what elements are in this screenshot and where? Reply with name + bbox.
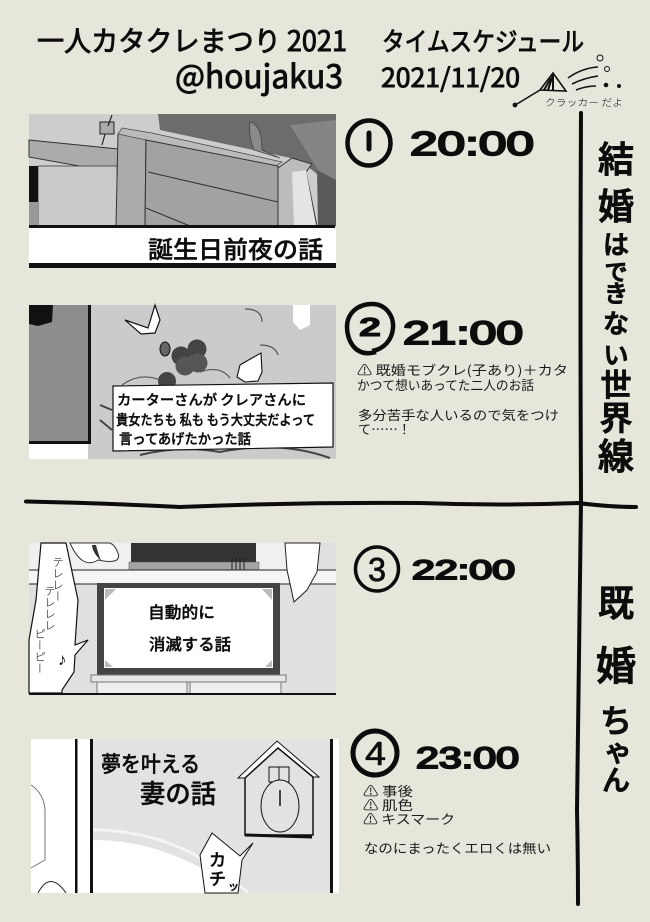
- title: 一人カタクレまつり 2021: [37, 20, 347, 60]
- side label: married: ゃ: [604, 730, 632, 770]
- panel: comic 4: [31, 739, 339, 894]
- side label: married: 婚: [596, 634, 636, 692]
- comic 2 caption box: 貴女たちも 私も もう大丈夫だよって: [116, 410, 315, 430]
- sound bubble: カ: [209, 846, 226, 871]
- time slot 1: [348, 120, 534, 166]
- left sound bubble: テレレー: [50, 556, 66, 602]
- side label: world line where marriage is impossible: 婚: [598, 178, 634, 230]
- title: [37, 20, 584, 60]
- side label: world line where marriage is impossible: い: [603, 336, 629, 372]
- note for slot 2: かつて想いあってた二人のお話: [357, 375, 534, 394]
- TV title: [148, 599, 231, 655]
- left sound bubble: ♪: [58, 650, 66, 669]
- small dog figure: [70, 543, 119, 563]
- right bubble: [285, 543, 320, 602]
- author handle and date: [175, 52, 520, 98]
- side label: married: ち: [600, 696, 632, 742]
- side label: world line where marriage is impossible: 線: [598, 428, 634, 480]
- note for slot 2: て……！: [358, 419, 411, 438]
- author handle and date: @houjaku3: [175, 52, 343, 98]
- author handle and date: 2021/11/20: [381, 58, 520, 95]
- comic 2 caption box: 言ってあげたかった話: [119, 429, 251, 449]
- time slot 3: 3: [368, 551, 386, 588]
- comic 2 caption box: カーターさんが クレアさんに: [117, 390, 306, 410]
- side label: world line where marriage is impossible: な: [603, 304, 629, 341]
- note for slot 4: なのにまったくエロくは無い: [364, 838, 551, 857]
- side label: world line where marriage is impossible: 世: [600, 360, 632, 405]
- TV title: 消滅する話: [149, 631, 231, 655]
- side label: world line where marriage is impossible: で: [604, 253, 628, 287]
- time slot 4: [353, 731, 519, 775]
- time slot 3: 22:00: [412, 555, 515, 585]
- comic 1 caption: 誕生日前夜の話: [148, 230, 323, 265]
- time slot 2: 21:00: [403, 315, 523, 351]
- icon: party cracker: クラッカー だよ: [545, 95, 623, 109]
- side label: world line where marriage is impossible: き: [604, 274, 628, 309]
- note for slot 4: ⚠ キスマーク: [363, 809, 455, 828]
- horizontal divider: [26, 502, 636, 507]
- flowers: [172, 346, 190, 366]
- time slot 3: [356, 547, 515, 591]
- title: タイムスケジュール: [382, 22, 584, 59]
- panel: comic 2: [29, 305, 336, 459]
- note for slot 4: [363, 781, 551, 857]
- side label: married: ん: [602, 759, 630, 799]
- left sound bubble: [29, 543, 88, 693]
- panel: comic 1: [29, 114, 336, 268]
- icon: cuckoo clock: [238, 741, 319, 837]
- comic 2 caption box: [113, 383, 333, 451]
- side label: world line where marriage is impossible: 界: [600, 392, 632, 440]
- icon: party cracker: [513, 55, 623, 109]
- sound bubble: チ: [209, 865, 226, 890]
- side label: married: 既: [598, 575, 634, 627]
- sound bubble: ッ: [228, 878, 239, 894]
- note for slot 2: ⚠ 既婚モブクレ(子あり)＋カタ: [357, 360, 568, 379]
- time slot 1: 20:00: [410, 125, 534, 162]
- time slot 4: 4: [365, 735, 386, 772]
- time slot 2: [347, 304, 523, 353]
- comic 4 title: 夢を叶える: [101, 747, 200, 779]
- time slot 4: 23:00: [416, 742, 519, 775]
- note for slot 4: ⚠ 肌色: [363, 795, 413, 814]
- TV title: 自動的に: [148, 599, 215, 623]
- side label: married: [596, 575, 636, 799]
- sound bubble: [200, 833, 253, 894]
- side label: world line where marriage is impossible: [598, 131, 634, 480]
- side label: world line where marriage is impossible: は: [603, 225, 629, 262]
- side label: world line where marriage is impossible: 結: [598, 131, 634, 183]
- note for slot 4: ⚠ 事後: [363, 781, 413, 800]
- comic 4 title: 妻の話: [140, 774, 216, 811]
- vertical divider: [577, 113, 581, 904]
- note for slot 2: 多分苦手な人いるので気をつけ: [358, 405, 559, 424]
- time slot 2: 2: [359, 312, 381, 342]
- comic 4 title: [101, 747, 216, 811]
- note for slot 2: [357, 360, 568, 438]
- panel: comic 3: [29, 543, 336, 695]
- left sound bubble: テレレレ: [42, 585, 58, 631]
- left sound bubble: ピーピー: [32, 628, 48, 674]
